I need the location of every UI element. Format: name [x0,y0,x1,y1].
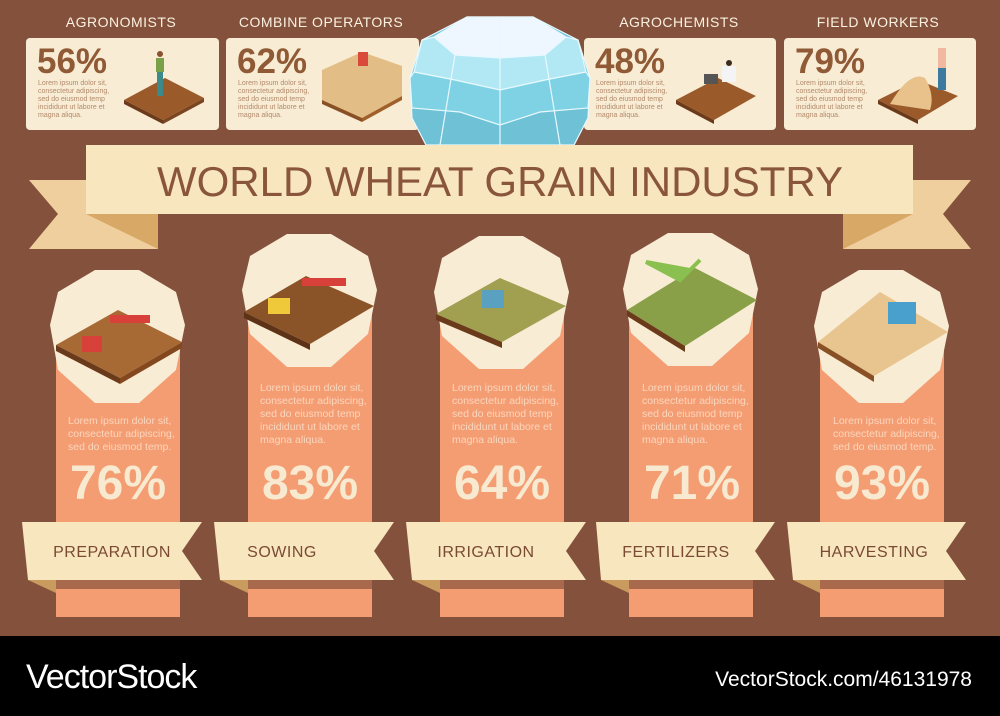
card: field workers: Lorem ipsum dolor sit, [796,80,865,87]
column: fertilizers: consectetur adipiscing, [642,395,749,407]
column: irrigation: incididunt ut labore et [452,421,552,433]
title banner with tails: WORLD WHEAT GRAIN INDUSTRY [157,158,843,205]
card: agrochemists [584,38,776,130]
column: preparation: PREPARATION [53,544,171,561]
card: agrochemists: magna aliqua. [596,112,640,119]
header labels [66,14,939,30]
column: sowing: Lorem ipsum dolor sit, [260,382,363,394]
card: field workers: 79% [795,42,865,81]
column: fertilizers: Lorem ipsum dolor sit, [642,382,745,394]
footer bar: VectorStock [26,658,198,696]
card: combine operators: sed do eiusmod temp [238,96,305,103]
column: harvesting [787,270,966,617]
column: sowing: SOWING [247,544,317,561]
column: sowing: incididunt ut labore et [260,421,360,433]
card: combine operators: consectetur adipiscing, [238,88,309,95]
card: combine operators: 62% [237,42,307,81]
column: irrigation: 64% [454,457,550,510]
column: preparation [22,270,202,617]
header labels: AGROCHEMISTS [619,14,739,30]
card: agronomists: magna aliqua. [38,112,82,119]
card: agronomists [26,38,219,130]
column: preparation: Lorem ipsum dolor sit, [68,415,171,427]
column: preparation: consectetur adipiscing, [68,428,175,440]
column: harvesting: 93% [834,457,930,510]
column: harvesting: HARVESTING [820,544,928,561]
card: agronomists: Lorem ipsum dolor sit, [38,80,107,87]
card: combine operators: Lorem ipsum dolor sit, [238,80,307,87]
column: fertilizers: magna aliqua. [642,434,708,446]
column: irrigation [406,236,586,617]
column: irrigation: sed do eiusmod temp [452,408,553,420]
column: irrigation: magna aliqua. [452,434,518,446]
column: harvesting: Lorem ipsum dolor sit, [833,415,936,427]
header labels: AGRONOMISTS [66,14,176,30]
dome [410,17,590,145]
column: fertilizers: sed do eiusmod temp [642,408,743,420]
card: field workers: incididunt ut labore et [796,104,863,111]
card: combine operators: magna aliqua. [238,112,282,119]
card: agrochemists: sed do eiusmod temp [596,96,663,103]
column: fertilizers: 71% [644,457,740,510]
column: fertilizers [596,233,775,617]
column: sowing: 83% [262,457,358,510]
column: sowing: magna aliqua. [260,434,326,446]
column: harvesting: consectetur adipiscing, [833,428,940,440]
title banner with tails [29,145,971,249]
column: sowing [214,234,394,617]
column: irrigation: IRRIGATION [437,544,535,561]
footer bar [0,636,1000,716]
card: agronomists: 56% [37,42,107,81]
card: agronomists: incididunt ut labore et [38,104,105,111]
card: agronomists: sed do eiusmod temp [38,96,105,103]
card: agrochemists: 48% [595,42,665,81]
header labels: COMBINE OPERATORS [239,14,403,30]
card: agrochemists: consectetur adipiscing, [596,88,667,95]
card: agronomists: consectetur adipiscing, [38,88,109,95]
footer bar: VectorStock.com/46131978 [715,668,972,691]
column: fertilizers: FERTILIZERS [622,544,730,561]
column: irrigation: Lorem ipsum dolor sit, [452,382,555,394]
column: irrigation: consectetur adipiscing, [452,395,559,407]
column: preparation: sed do eiusmod temp. [68,441,171,453]
column: harvesting: sed do eiusmod temp. [833,441,936,453]
card: field workers: consectetur adipiscing, [796,88,867,95]
column: fertilizers: incididunt ut labore et [642,421,742,433]
header labels: FIELD WORKERS [817,14,939,30]
card: combine operators [226,38,419,130]
card: field workers: magna aliqua. [796,112,840,119]
card: field workers [784,38,976,130]
column: sowing: sed do eiusmod temp [260,408,361,420]
card: agrochemists: incididunt ut labore et [596,104,663,111]
card: combine operators: incididunt ut labore et [238,104,305,111]
card: field workers: sed do eiusmod temp [796,96,863,103]
card: agrochemists: Lorem ipsum dolor sit, [596,80,665,87]
column: sowing: consectetur adipiscing, [260,395,367,407]
column: preparation: 76% [70,457,166,510]
